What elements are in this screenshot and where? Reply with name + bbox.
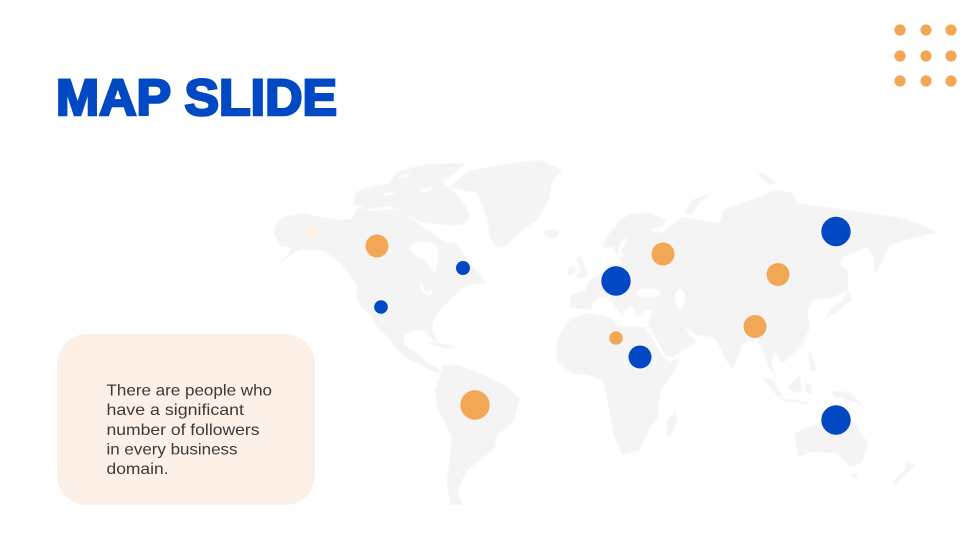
map: Caribbean islands	[423, 342, 460, 348]
map: Sumatra	[762, 377, 782, 397]
map: New Zealand	[892, 460, 915, 485]
card text: in every business	[106, 442, 238, 458]
map: Greenland	[450, 160, 562, 248]
map: Novaya Zemlya	[684, 192, 713, 214]
card background	[57, 334, 315, 505]
marker: faded Alaska	[304, 226, 318, 238]
card text: domain.	[106, 461, 168, 478]
marker: East Africa	[628, 346, 652, 368]
marker: Brazil	[460, 390, 490, 420]
map: Philippines	[808, 352, 817, 372]
map: Eurasia	[570, 190, 937, 380]
map: Inland seas	[618, 234, 685, 309]
map: Java	[780, 398, 808, 404]
map: New Guinea	[833, 391, 863, 405]
card text	[106, 382, 272, 478]
map: Severnaya Zemlya	[757, 173, 777, 184]
marker: Europe	[601, 266, 631, 296]
card text: number of followers	[106, 422, 260, 439]
title: MAP SLIDE	[56, 69, 337, 126]
panel: description card	[57, 334, 315, 505]
map: Tasmania	[850, 473, 858, 479]
world map	[273, 160, 937, 505]
map: South America	[435, 365, 520, 505]
map: North America	[273, 163, 487, 373]
map markers	[304, 217, 851, 435]
marker: Canada	[366, 234, 388, 258]
map: Arctic archipelago	[353, 163, 470, 226]
map: Madagascar	[666, 411, 678, 436]
card text: There are people who	[106, 382, 272, 400]
card text: have a significant	[106, 402, 245, 419]
decorative dot grid	[894, 24, 957, 87]
map: Australia	[795, 413, 868, 467]
marker: Russia east	[821, 217, 851, 246]
map: Sulawesi	[805, 382, 812, 394]
marker: Quebec	[456, 261, 470, 275]
marker: South Asia	[744, 315, 766, 338]
marker: United States	[374, 300, 388, 314]
marker: Australia	[821, 405, 851, 435]
map: Borneo	[787, 375, 802, 393]
map: British Isles	[576, 256, 589, 279]
marker: North Africa	[609, 331, 623, 345]
map: Africa	[557, 313, 680, 455]
map: Iceland	[543, 230, 558, 239]
map: Japan	[826, 290, 852, 318]
marker: Russia west	[652, 242, 674, 266]
marker: Mongolia	[766, 263, 790, 286]
map: Hudson Bay and Great Lakes	[362, 174, 438, 296]
